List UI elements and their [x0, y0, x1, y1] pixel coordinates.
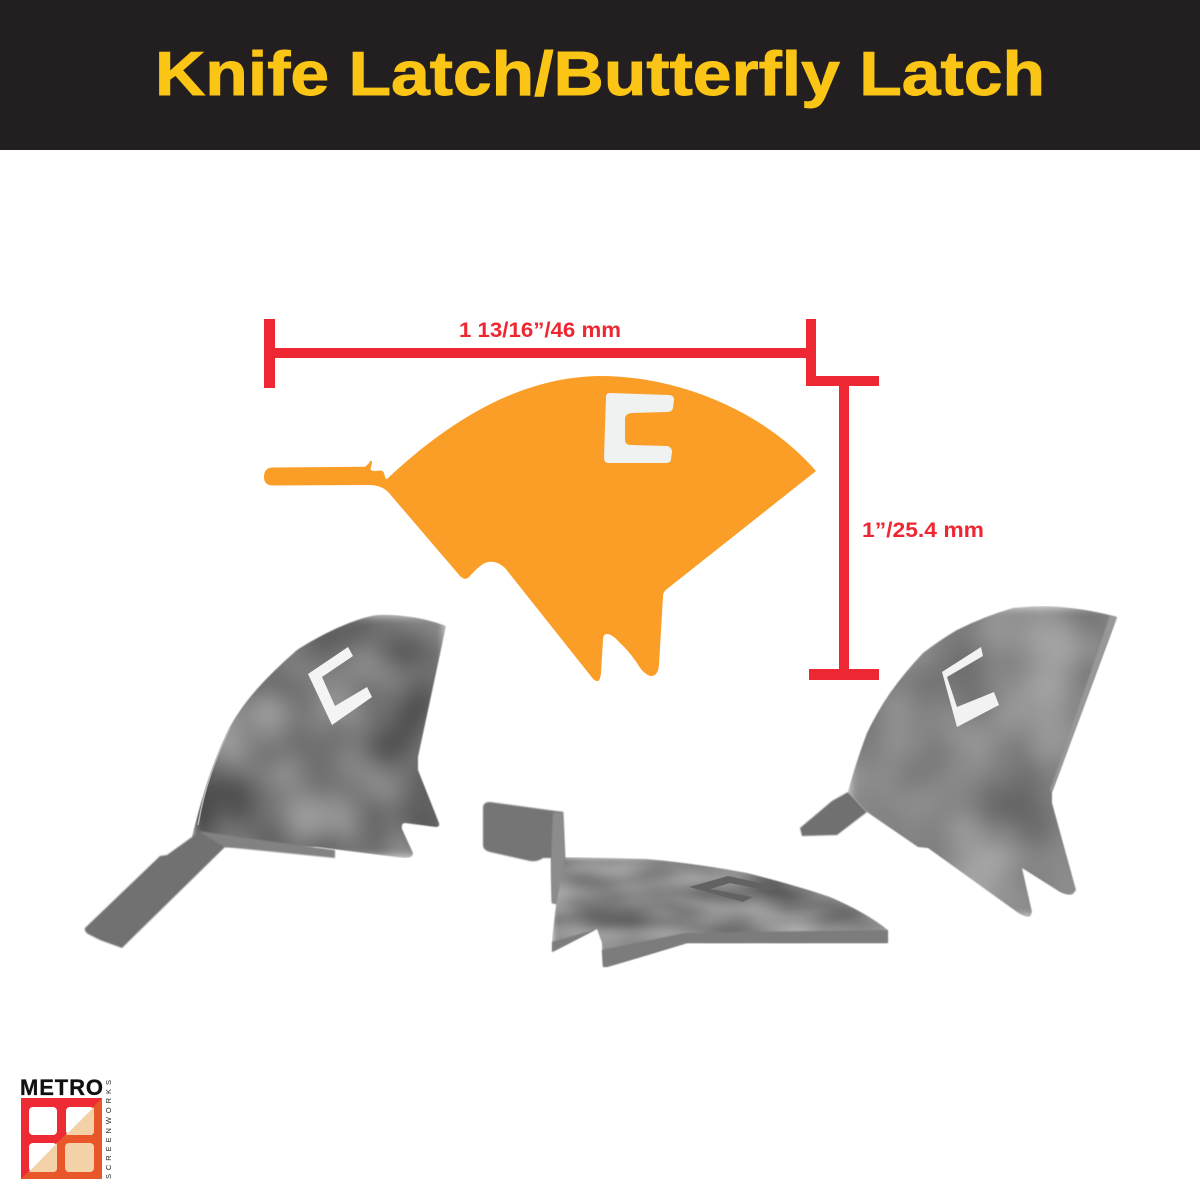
logo: Metro Screenworks: [20, 1075, 113, 1179]
middle latch slot: [689, 876, 782, 902]
left latch bottom lip: [198, 831, 335, 858]
middle latch thickness edge: [602, 930, 888, 967]
logo wordmark: METRO: [20, 1075, 103, 1100]
left latch slot: [308, 647, 372, 725]
left latch curved edge highlight: [198, 728, 230, 825]
logo square: [21, 1098, 102, 1179]
width dimension: bracket: [264, 319, 816, 388]
C-shaped slot: [604, 393, 674, 463]
height dimension label: 1”/25.4 mm: [862, 519, 984, 542]
title: Knife Latch/Butterfly Latch: [155, 40, 1045, 109]
right latch side edge: [1050, 616, 1117, 792]
left latch body: [192, 615, 446, 858]
left grey latch photo: [85, 615, 446, 948]
header band: [0, 0, 1200, 150]
right latch slot: [942, 647, 999, 727]
height dimension: bracket: [809, 376, 879, 680]
left latch front flange: [85, 832, 225, 948]
middle grey latch photo: [483, 802, 888, 967]
logo vertical tagline: SCREENWORKS: [104, 1080, 113, 1179]
right latch body: [848, 606, 1117, 917]
middle latch left thickness edge: [552, 929, 597, 952]
width dimension label: 1 13/16”/46 mm: [459, 319, 621, 342]
middle latch fold highlight: [551, 812, 565, 905]
right grey latch photo: [800, 606, 1117, 917]
middle latch body: [552, 857, 888, 967]
middle latch upright tab: [483, 802, 565, 905]
orange latch silhouette: [264, 376, 816, 681]
right latch front flange: [800, 792, 867, 836]
latch body: [264, 376, 816, 681]
